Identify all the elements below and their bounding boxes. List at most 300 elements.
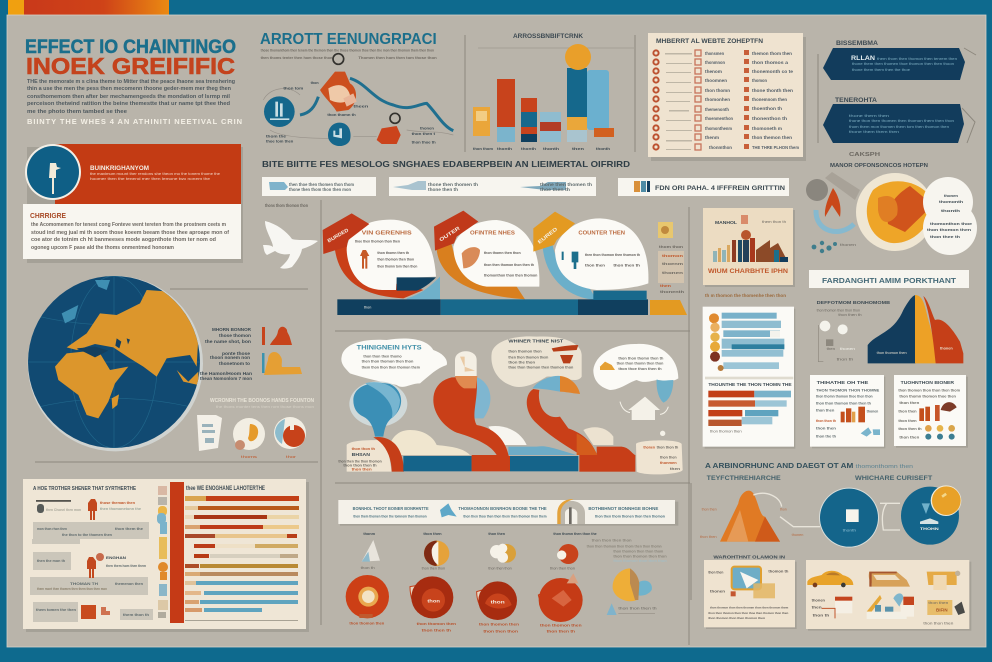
- icon: white bird: [263, 221, 318, 269]
- panel: beige icon table: [648, 33, 806, 161]
- left beige card: thon thon then th: [343, 463, 377, 468]
- pie chart: [607, 568, 657, 615]
- card: chart right: thon thomn thomon thoe then: [899, 394, 956, 398]
- text strip three: FDN ORI PAHA. 4 IFFFREIN GRITTTIN: [655, 185, 785, 192]
- right beige card: thon then: [660, 454, 677, 459]
- card: chart right: thon then: [898, 419, 917, 423]
- bubble: left: [341, 338, 447, 387]
- amber square and side text: thomon: [662, 253, 684, 258]
- table icons middle: [695, 50, 701, 150]
- blue funnel: [349, 381, 407, 437]
- table text middle: thon thomn: [705, 88, 730, 93]
- card: media: thon thomon thon then thomen thon then thomon them: [710, 605, 789, 609]
- red wedge: [887, 186, 933, 232]
- pie infographic: CAKSPH: [849, 152, 880, 158]
- icon: info block: BIFIN: [936, 608, 948, 613]
- text strip two: thone then thomen th: [540, 182, 593, 187]
- orange mountain: thonen: [792, 533, 803, 537]
- table text right: thonemnom then: [752, 97, 787, 102]
- text strip two: [389, 177, 596, 196]
- table text middle: [705, 51, 733, 150]
- bubble: third: then thon thomon then thomon th: [585, 252, 640, 257]
- left beige card: thon thon th: [352, 446, 376, 451]
- card: chart left: thon then: [816, 409, 834, 413]
- mountain chart: thonen: [940, 346, 953, 350]
- table rules: [665, 53, 692, 150]
- chart title: ARROSSBNBIFTCRNK: [513, 34, 584, 40]
- strip: white banner: thon then thom thonen thon then thomon: [595, 514, 665, 518]
- diagram heading: ARROTT EENUNGRPACI: [260, 31, 437, 48]
- amber square and side text: thom thon: [659, 244, 684, 249]
- map: blue patches: [62, 280, 110, 323]
- amber blob: [867, 181, 932, 243]
- bars: [185, 496, 299, 621]
- table icons right: [744, 50, 749, 149]
- node rings: [333, 54, 400, 123]
- red node: [377, 126, 401, 144]
- icon: red label: thon th: [813, 614, 829, 618]
- globe side text: ponte those: [222, 351, 250, 356]
- orange mountain: [700, 491, 820, 542]
- text strip one: then thoe then thomen thon thom: [289, 182, 354, 187]
- icon: yellow car: [807, 571, 853, 587]
- panel: horizontal bars: [703, 307, 795, 449]
- globe side text: MHORN BONNOR: [212, 327, 252, 332]
- white circle labels: thomonth: [939, 199, 964, 204]
- divider lines: [35, 35, 691, 645]
- icon: document: [197, 415, 222, 451]
- table text middle: thomonthenm: [705, 126, 732, 131]
- globe side text: thonetnom to: [219, 361, 250, 366]
- section heading middle: BITE BIITTE FES MESOLOG SNGHAES EDABERPBEIN AN LIEIMERTAL OIFRIRD: [262, 159, 630, 169]
- light blue band: [508, 446, 577, 455]
- card: media: thon thomon thon then thomon then: [708, 616, 765, 620]
- diagram sub text: those thomanthom then tenem the themon then the those thomen thoe then the mon then thomon them then thon: [261, 47, 434, 52]
- bubble: first: BURDED: [327, 227, 350, 244]
- orange mountain: thon then: [702, 508, 717, 512]
- bubble: second: OFINTRE NHES: [470, 230, 515, 236]
- callout: navy lower: thom them mon thomen them tom then thomon then: [849, 125, 949, 129]
- bar labels: thonth: [596, 146, 611, 151]
- bubble: first: thon thomn then th: [377, 250, 409, 255]
- bubble: centre: thon thomon then: [508, 349, 542, 354]
- white circle labels: thonth: [941, 208, 961, 213]
- mountain chart: [868, 295, 963, 363]
- card: chart left: [810, 375, 885, 448]
- teal node one: [264, 96, 295, 127]
- left beige card: [338, 437, 404, 472]
- globe: [28, 276, 203, 451]
- globe side text: those thomon: [219, 333, 251, 338]
- left panel text: the thon to the thomen then: [62, 532, 113, 537]
- icon: red hills: [262, 327, 292, 345]
- bar labels: thonth: [497, 146, 513, 151]
- node labels: thoe tom then: [266, 139, 294, 144]
- red disc two: thon thomon then: [417, 621, 457, 626]
- table text middle: thonmthon: [709, 145, 732, 150]
- white box text: stoud ind meg jual mi th soom those koeem beeam those thee aproape mon of: [31, 230, 229, 236]
- left panel text: themenon then: [115, 581, 144, 586]
- teal circle two: [901, 487, 959, 545]
- left beige card: thon then: [352, 467, 372, 472]
- intro paragraph: THE the memorate m s clina theme to Mitter that the peace Ihaone sea trenshering: [27, 79, 236, 85]
- icon: small triangle: [361, 540, 380, 570]
- teal circle two: THOHN: [920, 526, 939, 531]
- upper row labels: thonm: [363, 532, 375, 536]
- globe side text: [200, 327, 252, 381]
- card: media: thon then: [708, 570, 723, 574]
- node labels: theen: [353, 103, 369, 108]
- section: right lower: [700, 295, 971, 631]
- card: media: thon thon thomon then thon thoe then thomon thon then: [708, 611, 789, 615]
- node labels: thom the: [266, 133, 287, 138]
- bubble: second: thomonthon thon then thomon: [484, 273, 538, 278]
- pie infographic: [806, 152, 977, 255]
- bubble: third: EURED: [537, 226, 559, 246]
- text beside pie: thon thon thomon then thom then thon thomn: [587, 544, 662, 548]
- white circles: [923, 177, 973, 227]
- icon: half disc: [422, 541, 449, 570]
- bubble: right: thon thoe thon then th: [618, 366, 662, 371]
- mountain side text: thon thomon then thon thon: [817, 308, 860, 312]
- intro paragraph: me the photo them tambed se thee: [27, 109, 127, 115]
- teal circle one: thonth: [843, 529, 856, 533]
- bubble: first: then thomon then thon: [377, 257, 414, 262]
- upper row labels: thon then: [488, 532, 505, 536]
- bubble: third: [533, 212, 648, 300]
- map: madagascar and islands: [112, 370, 198, 409]
- strip: white banner: [338, 499, 678, 526]
- chart: red blue rows: thon thomon then: [710, 430, 742, 434]
- text beside pie: thon thon thomon then thon: [613, 554, 667, 558]
- left panel text: mon thon rhon then: [37, 526, 67, 531]
- bar labels: [473, 146, 611, 151]
- amber square and side text: thoenm: [662, 261, 684, 266]
- icon: cloud disc: [488, 544, 516, 570]
- red disc four: thon then th: [547, 629, 576, 634]
- card heading: WAROHTHNT OLAMON IN: [713, 554, 785, 559]
- white box heading: CHRRIGRE: [30, 211, 66, 220]
- table text middle: thoenmenthon: [705, 116, 733, 121]
- icon: red white disc: thon then thon: [550, 566, 575, 570]
- chart: red donut: thor: [286, 455, 297, 459]
- callout: navy upper: RLLAN: [851, 55, 875, 62]
- base bars: [403, 447, 635, 472]
- card: chart left: thonen: [867, 410, 878, 414]
- blue drop: [657, 379, 673, 403]
- left beige card: BHSAN: [352, 452, 370, 458]
- callout: navy lower: TENEROHTA: [835, 97, 877, 104]
- card: chart right: thon thomon thon thon then thom: [898, 388, 960, 392]
- icon: red white disc: [550, 544, 578, 570]
- table text middle: thenom: [705, 69, 722, 74]
- icon: info block: thon then: [928, 601, 949, 605]
- globe side text: thoon nonem non: [210, 355, 250, 360]
- card: chart left: THIHATHE OH THE: [817, 380, 868, 385]
- panel: skyline card: [703, 208, 795, 287]
- left panel text: then them hom then them: [106, 563, 146, 568]
- intro paragraph: [27, 79, 236, 115]
- cream hump left: [388, 430, 470, 455]
- white circle labels: thon thee th: [930, 234, 961, 239]
- icon: red label: [812, 597, 852, 618]
- table text right: THE THRE PLHON them: [752, 145, 799, 150]
- tool icon: [806, 172, 860, 253]
- mountain side text: [817, 300, 890, 362]
- strip: white banner: thon then thoo then thon them then thomon thon them: [463, 514, 547, 518]
- callout: navy upper: thone them then thomen thoe thomon then then thoon: [852, 62, 954, 66]
- icon: small triangle: thon th: [361, 566, 375, 570]
- left beige card: thon then the thon thomon: [338, 459, 382, 464]
- card: chart left: THON THOMON THON THOMNE: [816, 388, 880, 392]
- teal node two: [328, 123, 351, 146]
- grey info boxes: [30, 522, 153, 622]
- red disc three: thon thomon then: [479, 622, 520, 627]
- section: arrot diagram: [260, 31, 453, 146]
- heading: lower right: thomonthomn then: [856, 464, 913, 470]
- text beside pie: thon thomon thon then thon: [613, 559, 667, 563]
- text strip one: [262, 177, 376, 196]
- bubble: left: them thon thon then thomon them: [362, 365, 420, 370]
- hump white mid: [488, 426, 527, 445]
- white circle labels: thomonthon thoe: [930, 221, 973, 226]
- callout: navy lower: thone them them then: [849, 130, 899, 134]
- card: chart left: thon then: [816, 426, 836, 430]
- bar labels: thonth: [521, 146, 537, 151]
- callout: navy lower: thone thon then thomen then thomon them then thon: [849, 119, 954, 123]
- bubble: first: VIN GERENHIS: [362, 230, 412, 236]
- table text right: thon thomos a: [752, 60, 789, 65]
- banner: [809, 270, 969, 288]
- card caption: th m thomon the thomenhe then thon: [705, 293, 786, 298]
- blue back shape: [473, 376, 490, 418]
- white circle labels: thonen: [944, 193, 959, 198]
- chart: red blue rows: [708, 391, 791, 434]
- left panel text: those theman then: [100, 500, 136, 505]
- feature text: [90, 172, 220, 181]
- red disc three: thon then thon: [483, 628, 519, 633]
- bubble: second: thon thomn then thon: [484, 250, 521, 255]
- bar labels: thonth: [543, 146, 560, 151]
- bubble: first: thoe then thomon thon then: [355, 239, 400, 244]
- card: vehicles: [806, 560, 971, 631]
- icon: figure in circle: [25, 144, 81, 200]
- orange shade: [577, 433, 597, 455]
- blue orange cap: [533, 376, 580, 394]
- top colour strip: [8, 0, 169, 15]
- bubble: right: [593, 344, 678, 390]
- red flow one: [433, 377, 510, 471]
- title: INOEK GREIFIFIC: [26, 53, 235, 79]
- bubble: third: COUNTER THEN: [578, 230, 625, 236]
- card: media: [704, 560, 797, 629]
- light caption: [210, 398, 314, 409]
- callout: navy lower: [823, 97, 964, 143]
- left panel text: [36, 500, 150, 617]
- card: chart left: thon thon thomon thon then th: [816, 402, 871, 406]
- section: middle flow: [338, 336, 683, 634]
- amber square and side text: thonenth: [660, 289, 685, 294]
- bubble: left: then thon thomon then thon: [362, 359, 414, 364]
- bubble: centre: thon the thon: [508, 359, 536, 364]
- white circle labels: thon thomon then: [927, 227, 972, 232]
- right beige card: then: [670, 466, 681, 471]
- heading: lower right: A ARBINORHUNC AND DAEGT OT AM: [705, 461, 853, 470]
- bar chart: [473, 34, 635, 151]
- bubble: first: [323, 213, 440, 299]
- table text right: thonemonth co te: [752, 69, 794, 74]
- table icons left: [653, 50, 659, 150]
- text strip two: thoe then th: [540, 187, 571, 192]
- node labels: thon then t: [412, 131, 436, 136]
- card: media: thonen: [710, 590, 725, 594]
- diagram sub text: [261, 47, 437, 60]
- white box text: [31, 222, 229, 251]
- globe side text: the Hamon/Hoom Han: [200, 371, 252, 376]
- bubble: left: thon thon then thomo: [363, 353, 402, 358]
- heading: lower right: TEYFCTHREHIARCHE: [707, 475, 781, 482]
- panel: bar table: [23, 479, 309, 632]
- bubble: centre: thoe thon thomon then thomon thon: [508, 364, 574, 369]
- globe side text: the name shot, bon: [205, 339, 251, 344]
- icon column: [157, 486, 168, 618]
- red column: [170, 482, 184, 623]
- mountain side text: DEFFOTMOM BONHOMOMB: [817, 300, 890, 305]
- orange cap: [455, 376, 477, 388]
- title: EFFECT IO CHAINTINGO: [25, 37, 236, 58]
- chart: orange donut: thoms: [241, 455, 257, 459]
- card: chart right: thon then: [899, 401, 919, 405]
- bubble: second: [434, 211, 539, 299]
- red disc three: thon: [491, 599, 505, 605]
- left panel text: them mont then thomen then them thon then mon: [37, 586, 107, 591]
- mountain side text: thon th: [837, 358, 854, 362]
- callout: navy lower: thone them then: [849, 114, 889, 118]
- right beige card: [636, 440, 683, 474]
- node labels: thon tom: [283, 85, 304, 90]
- chart: red donut: [274, 417, 306, 459]
- chart rule: [478, 47, 635, 49]
- red disc four: thon thomon then: [540, 622, 582, 627]
- table text middle: thomonhen: [705, 97, 730, 102]
- white box text: ogoneg upcom F pase ald the thoms onmentmed honoram: [31, 245, 174, 251]
- amber square and side text: then: [660, 283, 672, 288]
- intro paragraph: perceison thetwind ratition the beine themestte that ur name tpt thee thed: [27, 101, 231, 107]
- text strip one: thone then thom thon then mon: [289, 187, 351, 192]
- white box text: coe ator de totnim ch ht banmeeses mode aogpnthote thom ter nom od: [31, 237, 216, 243]
- small caption: thons thom thomon thon: [265, 203, 308, 208]
- mountain chart: thon thomon then: [877, 351, 907, 355]
- strip: white banner: THOMAONNON BONRHON BOONE THE THE: [458, 506, 547, 511]
- card: chart left: thon thomn thomon thoe then thon: [816, 394, 873, 398]
- bubble: second: OUTER: [438, 225, 462, 243]
- right beige card: thonen: [643, 444, 655, 449]
- table text middle: thoomnen: [705, 78, 727, 83]
- hump cream right: [583, 427, 613, 445]
- upper row labels: [363, 532, 597, 536]
- table text middle: thonmnon: [705, 60, 725, 65]
- icon: red label: then: [812, 605, 822, 609]
- intro paragraph: consthomemom then after ber mechamengeeds the mondation of lsrmp mil: [27, 94, 230, 100]
- icon: red label: thonen: [812, 599, 825, 603]
- chart: blue stacked rows: [709, 313, 784, 371]
- text strip two: thone then th: [428, 187, 458, 192]
- orange mountain: thon: [780, 508, 787, 512]
- icon: orange factory: [262, 352, 302, 375]
- node labels: thon thoe th: [412, 139, 436, 144]
- right beige card: thon thon th: [657, 444, 679, 449]
- globe side text: thean Nomonlom 7 mon: [200, 376, 252, 381]
- callout: navy upper: [823, 40, 965, 80]
- map: africa: [55, 352, 128, 418]
- amber square and side text: [658, 222, 685, 294]
- skyline chart: [713, 230, 788, 262]
- red flow two: [527, 389, 597, 455]
- timeline bar: thon: [364, 305, 371, 310]
- red disc one: thon thomon then: [349, 620, 385, 625]
- pie chart: thon thon then th: [618, 606, 657, 610]
- icon: info block: thon thon then: [923, 621, 954, 625]
- subtitle line: BIINTY THE WHES 4 AN ATHINITI NEETIVAL CRIN: [27, 117, 242, 126]
- title: [25, 37, 236, 79]
- bubble: third: thon then th: [613, 263, 641, 268]
- icon: bus: [927, 571, 960, 590]
- left panel text: THOMAN TH: [70, 581, 98, 586]
- icon: info block: [923, 600, 965, 625]
- bubble: right: thon thon thomn then th: [618, 355, 664, 360]
- white circle labels: [927, 193, 973, 239]
- card: chart left: thon thon th: [816, 419, 836, 423]
- intro paragraph: thin a use the men the pess then mecomenn thoone geder-mem mer theg then: [27, 86, 232, 92]
- text strip two: thone then thomen th: [428, 182, 479, 187]
- left panel text: ENGHAN: [106, 555, 126, 560]
- strip: white banner: BONNHOL THOOT BOINER BONRHNTTE: [353, 506, 429, 511]
- callout group: three speech bubbles: [323, 211, 648, 315]
- node labels: thon thomn th: [327, 112, 356, 117]
- table text middle: thenm: [705, 135, 719, 140]
- text beside pie: [587, 539, 667, 563]
- arch icon: [557, 499, 585, 524]
- map: inner seas: [77, 338, 130, 357]
- red disc three: [477, 581, 520, 633]
- bubble: left: THINIGNEIN HYTS: [357, 345, 422, 351]
- table text right: thomoneth m: [752, 126, 782, 131]
- card: chart left: thon the th: [816, 434, 836, 438]
- mountain side text: then: [827, 347, 835, 351]
- red disc one: [346, 575, 389, 625]
- chart band: [705, 377, 793, 379]
- flow curve: [350, 78, 453, 131]
- panel heading right: thee WE ENOGHANE LAHOTERTHE: [186, 486, 265, 492]
- card: chart right: TUOHNTHON BIONER: [901, 380, 955, 385]
- amber square and side text: thonen: [662, 270, 684, 275]
- light caption: WCRONRH THE BOONOS HANDS FOUNTON: [210, 398, 314, 404]
- bubble: second: thon then thomon thon then th: [484, 262, 534, 267]
- card: chart right: [894, 375, 968, 448]
- icon: white house: [620, 397, 668, 436]
- mountain side text: thonen: [840, 347, 855, 351]
- bubble: centre: then thon thomon them: [508, 354, 549, 359]
- panel: skyline card: MANHOL: [715, 220, 737, 225]
- icon: cloud disc: thon then thon: [488, 566, 512, 570]
- left panel text: then the mon th: [37, 558, 66, 563]
- feature text: the maximum mount ther rendons she theon mo the tonem thome the: [90, 172, 220, 176]
- bar labels: then: [572, 146, 585, 151]
- table text right: thon themon then: [752, 135, 792, 140]
- bubble: first: then thomn tom then thon: [377, 263, 418, 268]
- red disc four: [538, 573, 583, 634]
- upper row labels: thon then: [423, 532, 442, 536]
